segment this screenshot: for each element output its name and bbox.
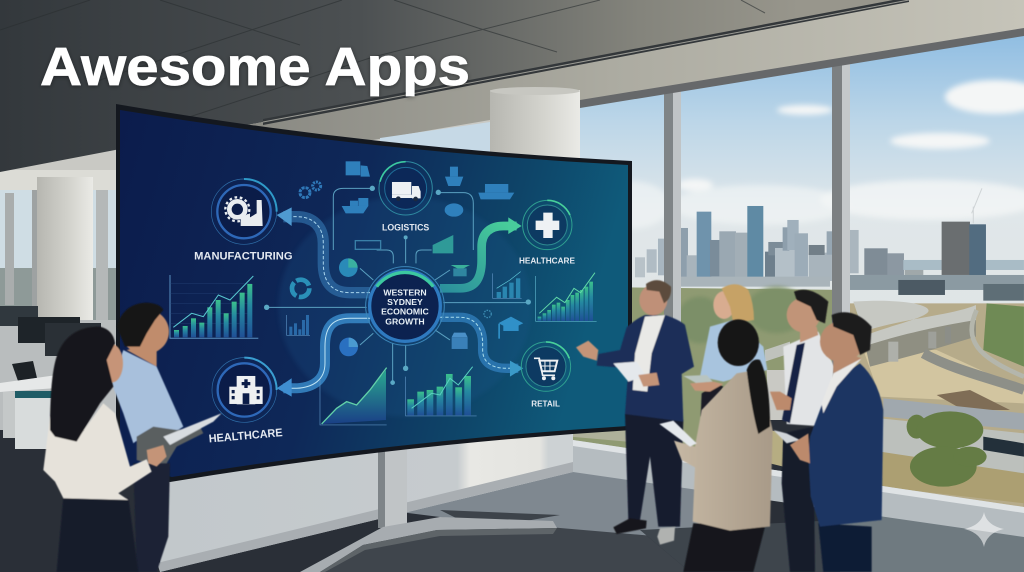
- small windows behind screen: [380, 122, 490, 160]
- node: healthcare right: [519, 200, 575, 266]
- hub: Western Sydney Economic Growth: GROWTH: [385, 316, 425, 326]
- icons: transport: [342, 161, 514, 217]
- node: hospital healthcare: [208, 358, 284, 446]
- air vent: [263, 0, 909, 125]
- node: logistics: [379, 162, 432, 233]
- tree: [907, 411, 987, 487]
- person: man in blue shirt: [112, 303, 222, 572]
- hub: Western Sydney Economic Growth: SYDNEY: [387, 297, 423, 307]
- window sky: [580, 33, 1024, 330]
- node: retail: RETAIL: [531, 398, 561, 408]
- node: manufacturing: MANUFACTURING: [194, 250, 293, 262]
- floor carpet: [0, 420, 1024, 572]
- background column: [490, 90, 580, 180]
- title: Awesome Apps: [40, 37, 470, 97]
- icon: gears: [300, 182, 321, 198]
- connector lines: [267, 188, 528, 382]
- hub: Western Sydney Economic Growth: ECONOMIC: [381, 307, 430, 317]
- node: manufacturing: [194, 179, 293, 262]
- landscape and highway: [570, 287, 1024, 510]
- chart: bottom bars: [406, 367, 477, 416]
- icon: sparkle watermark: [964, 512, 1004, 547]
- person: man with tie: [770, 290, 834, 572]
- crane: [972, 188, 982, 223]
- ceiling panel seams: [0, 0, 765, 120]
- person: presenter in navy suit: [576, 280, 694, 545]
- ribbon arrows: [283, 217, 518, 388]
- icons: pie charts and small symbols: [292, 235, 523, 356]
- chart: left bar chart: [170, 275, 258, 338]
- chart: area chart: [320, 368, 387, 425]
- ceiling: [0, 0, 909, 172]
- left column: [37, 177, 93, 322]
- person: man in blue suit: [773, 312, 883, 572]
- city skyline: [635, 188, 1024, 301]
- person: blonde woman: [683, 284, 767, 417]
- chart: right bars: [536, 273, 597, 321]
- screen stand: [300, 440, 557, 572]
- hub: Western Sydney Economic Growth: [366, 267, 444, 345]
- middle pane greenery: [570, 287, 850, 483]
- panel: curved display screen: [116, 104, 632, 482]
- hub: Western Sydney Economic Growth: WESTERN: [383, 287, 427, 297]
- person: woman in white blouse: [43, 327, 167, 572]
- soffit: [116, 0, 1024, 200]
- node: healthcare right: HEALTHCARE: [519, 256, 575, 266]
- window mullions: [580, 28, 1024, 492]
- window sill: [573, 440, 1024, 537]
- plinth wall under the screen: [157, 410, 573, 572]
- node: hospital healthcare: HEALTHCARE: [208, 427, 284, 446]
- office desk area: [0, 306, 116, 449]
- chart: small bars right: [493, 272, 522, 298]
- node: logistics: LOGISTICS: [382, 223, 429, 233]
- chart: small bars left: [287, 315, 310, 335]
- clouds: [590, 80, 1024, 229]
- right pane ground: [850, 303, 1024, 510]
- person: woman in beige blazer: [659, 319, 773, 572]
- node: retail: [521, 342, 571, 408]
- left office windows: [0, 170, 116, 328]
- arrow heads: [277, 207, 523, 397]
